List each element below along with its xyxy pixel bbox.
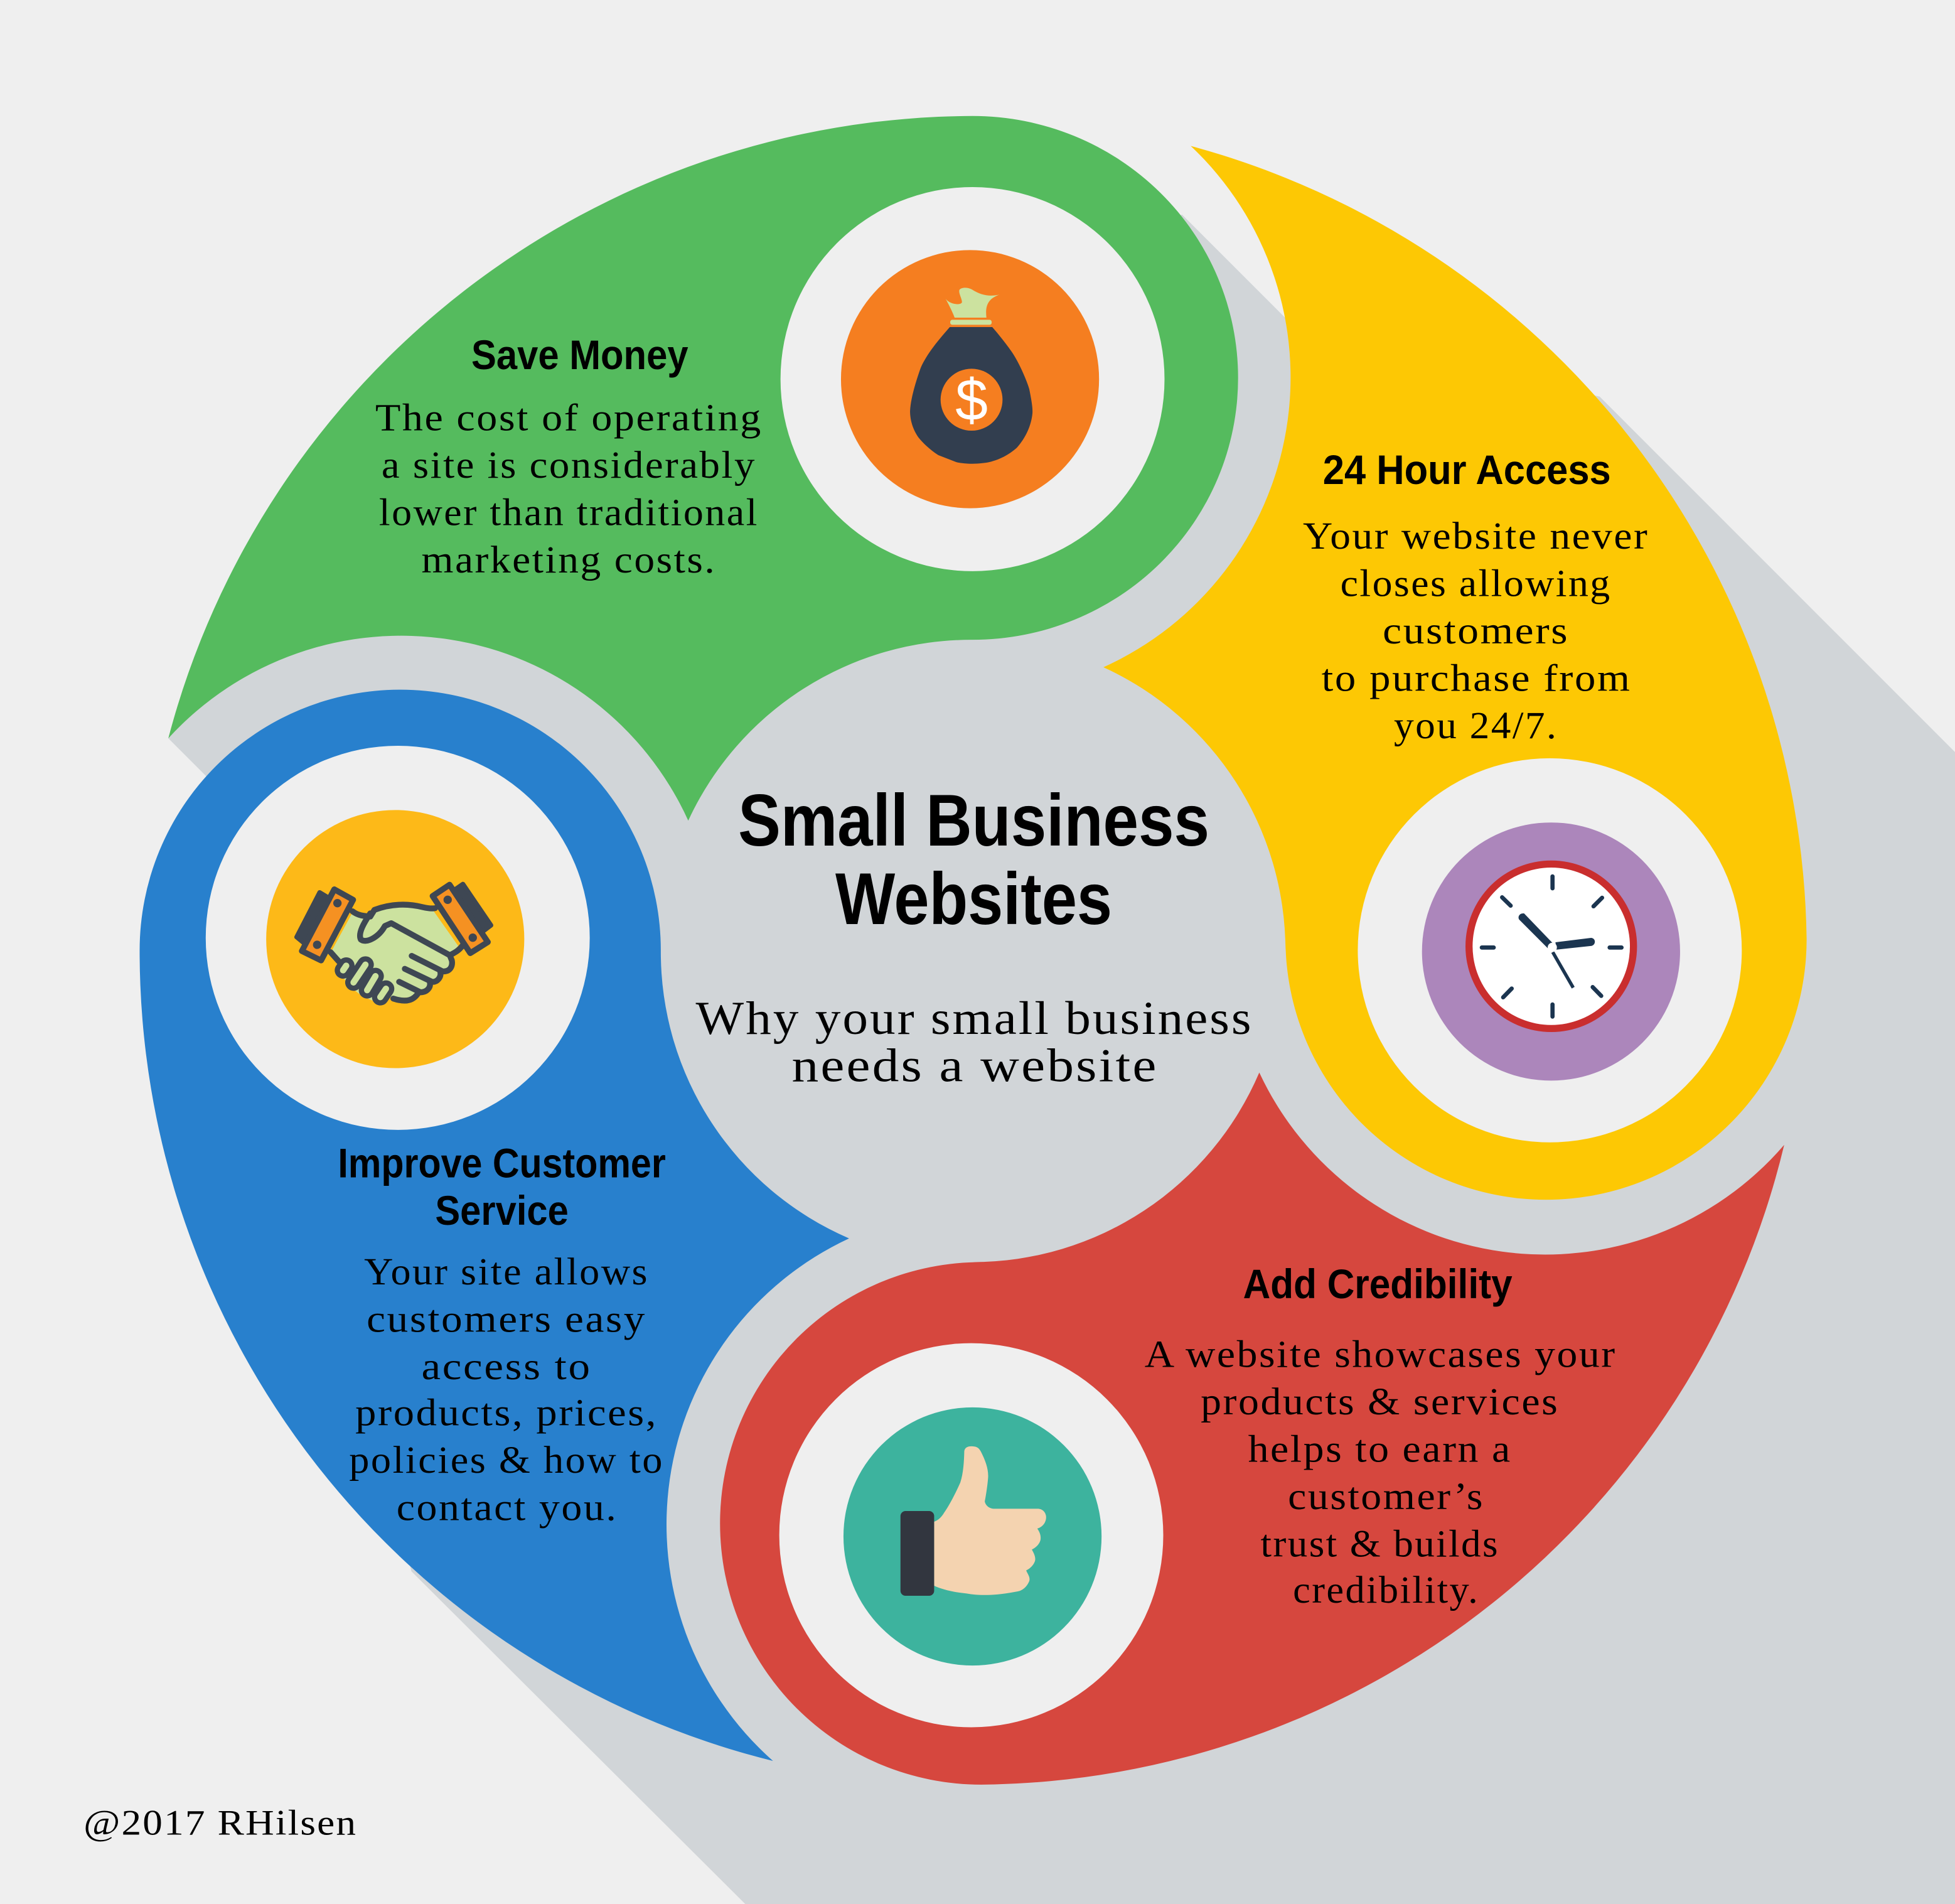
heading: improve customer service xyxy=(338,1140,666,1234)
text: save money body xyxy=(375,396,763,581)
heading: add credibility: Add Credibility xyxy=(1243,1261,1513,1307)
copyright: @2017 RHilsen xyxy=(83,1803,357,1842)
icon: clock xyxy=(1358,758,1742,1143)
red blade xyxy=(720,1073,1784,1785)
heading: 24 hour access: 24 Hour Access xyxy=(1323,447,1611,493)
text: improve customer service body: products, prices, xyxy=(355,1392,658,1434)
subtitle: needs a website xyxy=(791,1040,1159,1092)
text: add credibility body: A website showcases your xyxy=(1145,1333,1617,1375)
heading: improve customer service: Service xyxy=(435,1188,569,1234)
text: improve customer service body xyxy=(349,1251,664,1529)
heading: save money: Save Money xyxy=(471,332,688,378)
text: add credibility body xyxy=(1145,1333,1617,1611)
text: 24 hour access body: customers xyxy=(1383,610,1569,652)
text: 24 hour access body: you 24/7. xyxy=(1394,704,1558,747)
text: save money body: marketing costs. xyxy=(421,539,716,581)
text: add credibility body: trust & builds xyxy=(1260,1522,1499,1565)
text: improve customer service body: access to xyxy=(421,1345,592,1388)
title: Websites xyxy=(835,858,1112,940)
text: add credibility body: products & services xyxy=(1201,1380,1559,1423)
text: save money body: The cost of operating xyxy=(375,396,763,439)
panel: improve customer service xyxy=(139,690,849,1761)
text: improve customer service body: customers easy xyxy=(367,1298,646,1341)
text: save money body: lower than traditional xyxy=(379,491,759,534)
blue blade xyxy=(139,690,849,1761)
text: improve customer service body: Your site allows xyxy=(364,1251,649,1293)
yellow blade xyxy=(1103,146,1807,1200)
text: 24 hour access body: closes allowing xyxy=(1341,562,1612,605)
icon: money bag xyxy=(781,187,1164,571)
text: add credibility body: customer’s xyxy=(1288,1475,1484,1518)
heading: improve customer service: Improve Customer xyxy=(338,1140,666,1186)
subtitle xyxy=(696,992,1253,1092)
subtitle: Why your small business xyxy=(696,992,1253,1045)
title: Small Business xyxy=(738,779,1209,861)
icon: thumbs up xyxy=(779,1343,1164,1727)
text: 24 hour access body: Your website never xyxy=(1303,515,1649,557)
text: improve customer service body: contact you. xyxy=(397,1487,618,1529)
green blade xyxy=(168,116,1238,820)
icon: handshake xyxy=(206,746,590,1130)
text: improve customer service body: policies & how to xyxy=(349,1439,664,1482)
text: add credibility body: credibility. xyxy=(1293,1569,1479,1611)
icon: money bag: $ xyxy=(955,367,988,433)
panel: save money xyxy=(168,116,1238,820)
text: save money body: a site is considerably xyxy=(382,444,756,487)
panel: 24 hour access xyxy=(1103,146,1807,1200)
text: add credibility body: helps to earn a xyxy=(1248,1428,1512,1470)
text: 24 hour access body: to purchase from xyxy=(1322,657,1631,700)
title xyxy=(738,779,1209,940)
text: 24 hour access body xyxy=(1303,515,1649,747)
panel: add credibility xyxy=(720,1073,1784,1785)
